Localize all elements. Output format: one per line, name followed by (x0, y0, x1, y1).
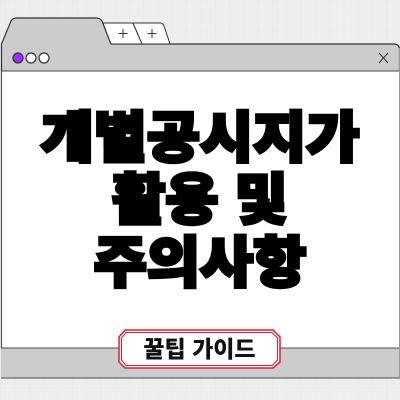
close icon (379, 53, 388, 63)
title: 활용 및 (112, 169, 288, 231)
window control dots (13, 53, 49, 63)
badge: tip guide: 꿀팁 가이드 (143, 336, 256, 362)
title: 개별공시지가 (41, 107, 359, 169)
tabs (103, 23, 170, 44)
title: 주의사항 (94, 232, 306, 294)
